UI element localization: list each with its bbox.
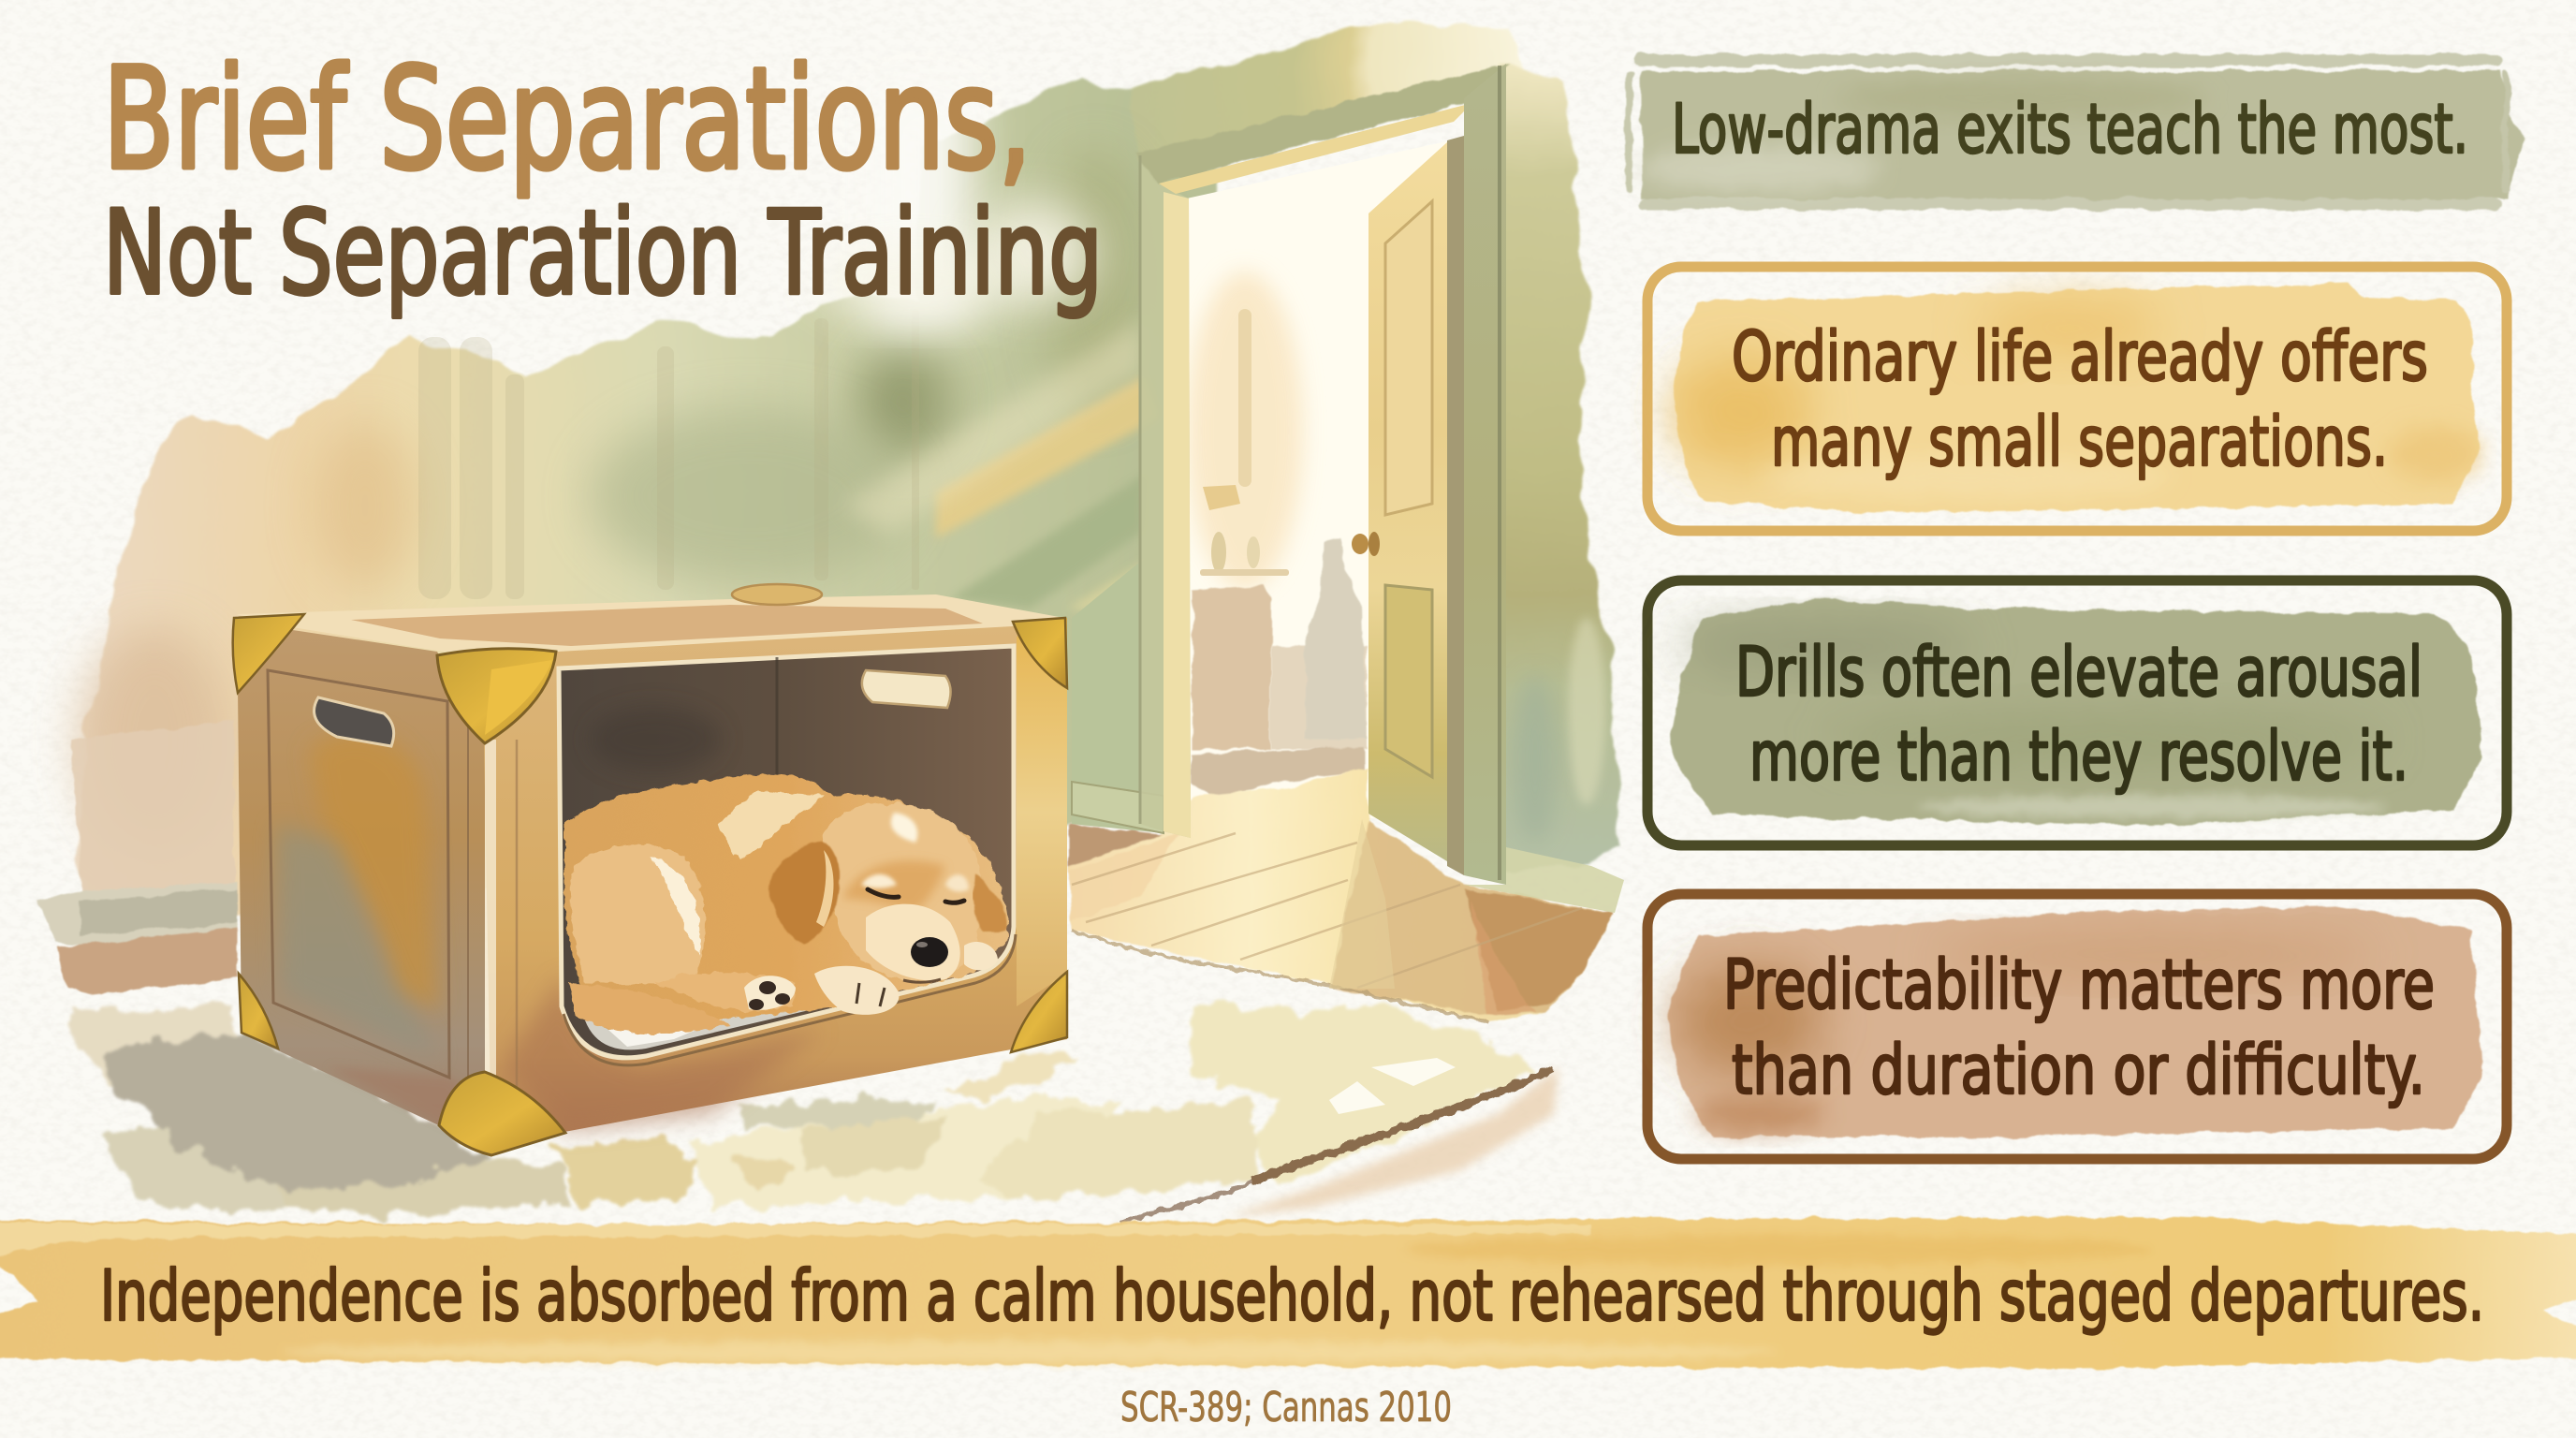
- rug fringe shadow: [1226, 1067, 1559, 1217]
- puppy front paws: [814, 966, 899, 1015]
- puppy tail: [569, 983, 730, 1034]
- door knob: [1352, 534, 1368, 554]
- crate opening: [559, 646, 1014, 1058]
- puppy ear: [769, 841, 840, 944]
- panel border: [1647, 580, 2507, 845]
- crate left side: [238, 629, 485, 1147]
- crate mat: [585, 936, 1002, 1049]
- open door leaf: [1352, 136, 1464, 875]
- puppy muzzle: [866, 904, 960, 981]
- soft halo behind title: [814, 84, 1095, 328]
- panel text: Predictability matters more: [1723, 946, 2435, 1025]
- door frame: [1134, 63, 1624, 913]
- puppy rear leg and paw: [655, 973, 796, 1011]
- brush wash: [1626, 54, 2524, 210]
- wall drips: [418, 309, 919, 599]
- title: [103, 38, 1103, 321]
- floor lines: [1072, 833, 1582, 988]
- takeaway band: [0, 1217, 2576, 1369]
- sleeping puppy: [564, 774, 1009, 1034]
- title line one: Brief Separations,: [103, 38, 1032, 201]
- crate side handle: [315, 697, 394, 746]
- crate lid handle: [732, 584, 822, 605]
- wall shading: [80, 150, 1605, 852]
- light beam on floor: [1329, 819, 1395, 989]
- illustration: crate, sleeping puppy and open door: [37, 25, 1624, 1223]
- panel: predictability: [1647, 894, 2507, 1159]
- crate front: [483, 618, 1067, 1153]
- door wall panel: [1072, 552, 1164, 833]
- puppy nose: [911, 937, 948, 967]
- puppy closed eyes: [868, 889, 964, 902]
- rug fringe: [1251, 1069, 1554, 1181]
- title line two: Not Separation Training: [103, 186, 1103, 321]
- brush wash: [0, 1217, 2576, 1369]
- floorboards: [1069, 768, 1615, 1022]
- panel: ordinary life: many small separations.: [1771, 403, 2388, 482]
- panel: ordinary life: [1647, 267, 2507, 531]
- puppy head: [823, 803, 984, 981]
- panel: low-drama exits: [1626, 54, 2524, 210]
- panel: predictability: than duration or difficulty.: [1732, 1031, 2425, 1110]
- brush wash: [1668, 906, 2482, 1137]
- room through doorway: [1187, 140, 1451, 824]
- crate corners: [233, 614, 1067, 1155]
- brush wash: [1671, 283, 2481, 513]
- panel: drills: [1647, 580, 2507, 845]
- panel: drills: more than they resolve it.: [1749, 717, 2408, 797]
- rug: [70, 931, 1559, 1223]
- puppy shoulder highlight: [716, 791, 824, 861]
- panel border: [1647, 267, 2507, 531]
- crate: [233, 584, 1067, 1155]
- source citation: SCR-389; Cannas 2010: [1120, 1384, 1452, 1431]
- puppy haunch: [571, 845, 705, 985]
- brush wash: [1671, 599, 2482, 826]
- left baseboard and floor: [37, 721, 237, 994]
- rug left shadow: [70, 1002, 571, 1215]
- crate inner handle: [862, 670, 951, 708]
- puppy body: [564, 774, 1009, 1030]
- panel text: Drills often elevate arousal: [1735, 633, 2422, 712]
- rug right patches: [552, 1000, 1535, 1208]
- crate top: [236, 594, 1064, 667]
- panel text: Ordinary life already offers: [1732, 317, 2428, 397]
- wall wash: [78, 25, 1623, 917]
- panel border: [1647, 894, 2507, 1159]
